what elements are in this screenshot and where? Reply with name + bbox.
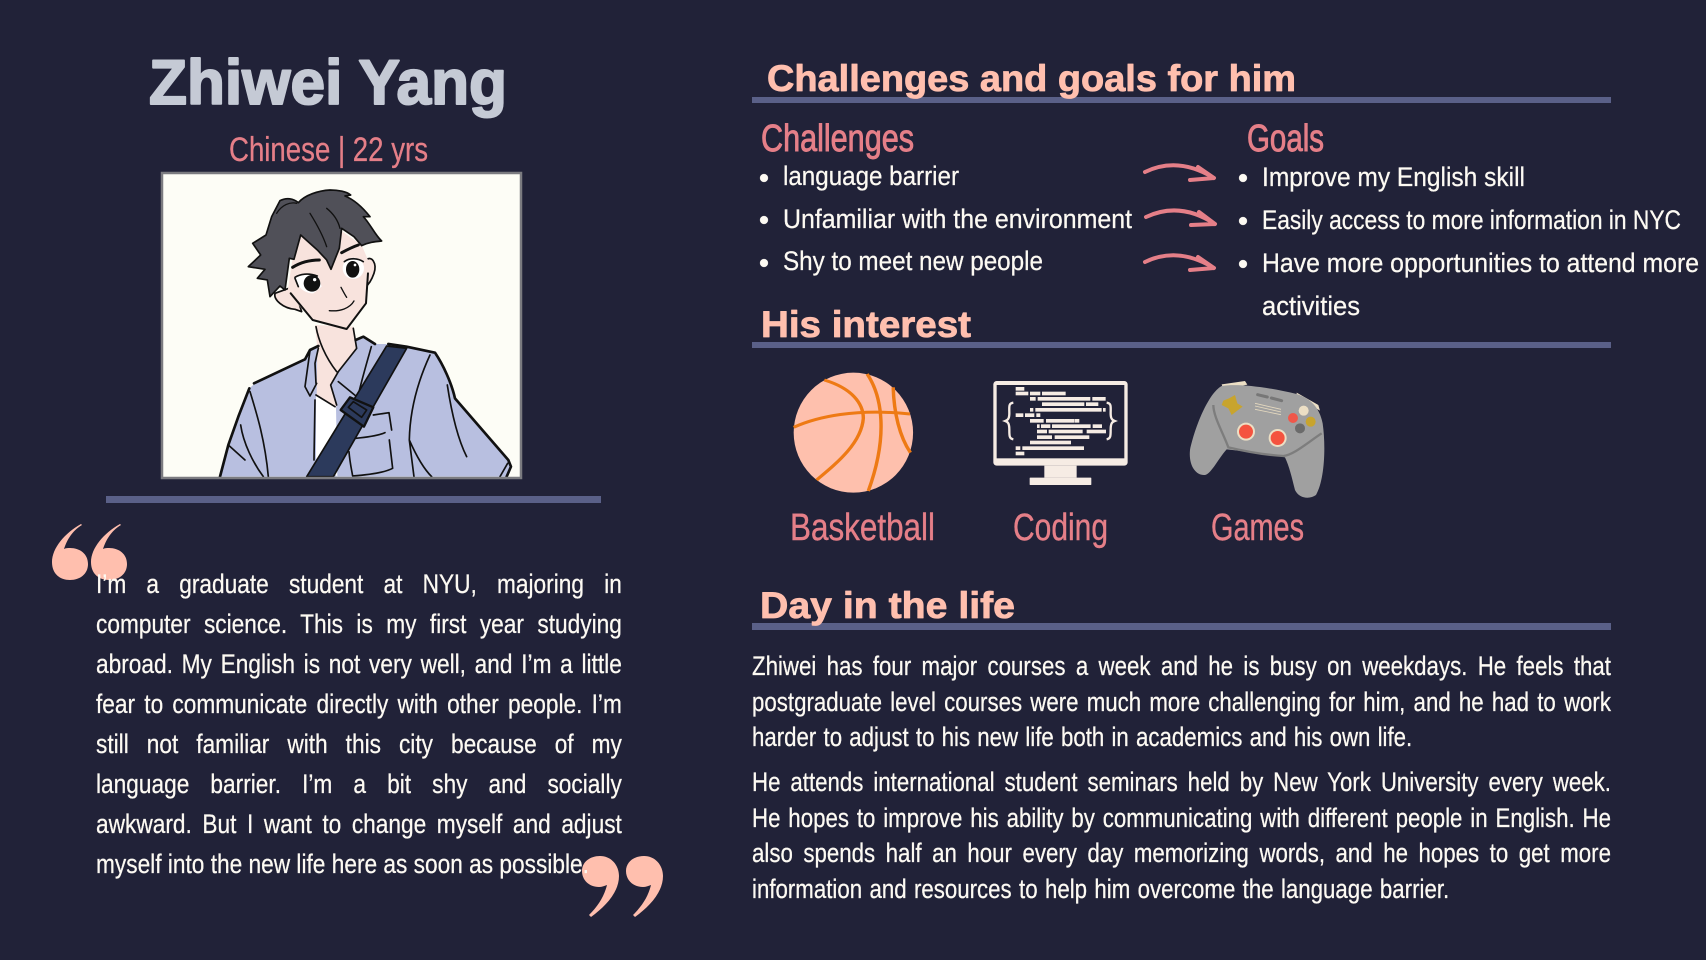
text block: day in the life paragraph 2: also spends half an hour every day memorizing words, and he hopes to get more (752, 838, 1611, 868)
divider under portrait (106, 496, 601, 503)
icon: game controller (1190, 381, 1324, 498)
heading: challenges and goals: Challenges and goals for him (767, 58, 1296, 99)
text block: day in the life paragraph 1 (752, 651, 1612, 752)
text block: personal quote: myself into the new life here as soon as possible. (96, 849, 589, 879)
icon: closing quote mark (582, 856, 663, 917)
label: coding: Coding (1013, 507, 1108, 549)
text block: day in the life paragraph 1: Zhiwei has four major courses a week and he is busy on weekdays. He feels that (752, 651, 1611, 681)
text block: personal quote: computer science. This is my first year studying (96, 609, 622, 639)
label: basketball: Basketball (790, 507, 935, 549)
arrows from challenges to goals (1145, 165, 1215, 270)
text block: personal quote: language barrier. I’m a bit shy and socially (96, 769, 622, 799)
text block: day in the life paragraph 1: postgraduate level courses were much more challenging for him, and he had to work (752, 686, 1611, 716)
text block: personal quote: fear to communicate directly with other people. I’m (96, 689, 622, 719)
challenges list: language barrier (783, 161, 959, 191)
icon: basketball (794, 373, 913, 493)
text block: personal quote: still not familiar with this city because of my (96, 729, 622, 759)
text block: personal quote: I’m a graduate student at NYU, majoring in (96, 569, 622, 599)
column heading: goals: Goals (1247, 118, 1324, 160)
goals list: activities (1262, 291, 1360, 321)
portrait illustration (162, 173, 521, 478)
goals list: Improve my English skill (1262, 162, 1525, 192)
column heading: challenges: Challenges (761, 118, 914, 160)
panel: day in the life heading (752, 585, 1611, 630)
challenges list: Shy to meet new people (783, 246, 1043, 276)
icon: coding monitor (993, 381, 1128, 485)
text block: day in the life paragraph 2: He attends international student seminars held by New York University every week. (752, 767, 1611, 797)
text block: day in the life paragraph 1: harder to adjust to his new life both in academics and his own life. (752, 722, 1412, 752)
panel: challenges and goals (752, 58, 1699, 321)
goals list (1239, 162, 1699, 321)
text block: day in the life paragraph 2 (752, 767, 1611, 904)
text block: personal quote (96, 569, 622, 879)
text block: personal quote: abroad. My English is not very well, and I’m a little (96, 649, 622, 679)
challenges list: Unfamiliar with the environment (783, 204, 1132, 234)
heading: his interest: His interest (761, 304, 971, 345)
text block: day in the life paragraph 2: information and resources to help him overcome the language barrier. (752, 874, 1449, 904)
panel: his interest (752, 304, 1611, 549)
title: Zhiwei Yang (149, 48, 507, 118)
label: games: Games (1211, 507, 1304, 549)
challenges list (760, 161, 1132, 276)
text block: day in the life paragraph 2: He hopes to improve his ability by communicating with different people in English. He (752, 802, 1611, 832)
text block: personal quote: awkward. But I want to change myself and adjust (96, 809, 622, 839)
heading: day in the life: Day in the life (760, 585, 1015, 626)
icon: opening quote mark (52, 524, 127, 580)
subtitle: nationality and age: Chinese | 22 yrs (229, 131, 428, 169)
